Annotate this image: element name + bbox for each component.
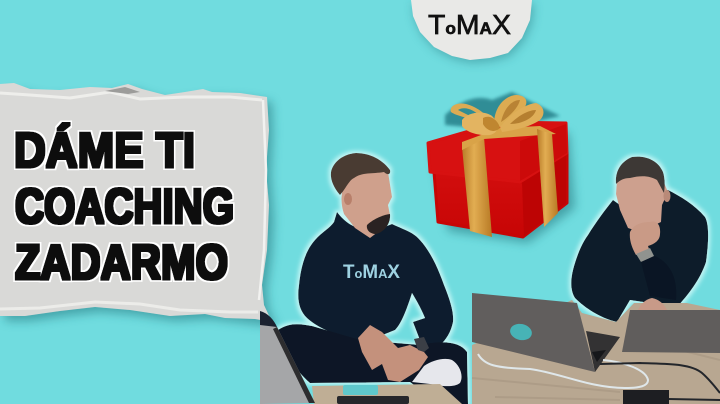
ear bbox=[664, 190, 670, 202]
phone black bbox=[337, 396, 409, 404]
wristwatch bbox=[636, 248, 654, 262]
cables and charger bbox=[478, 354, 720, 404]
bow bbox=[451, 95, 543, 135]
laptop centre bbox=[472, 293, 620, 372]
face bbox=[616, 172, 668, 232]
headline: DÁME TI bbox=[14, 124, 195, 178]
laptop left foreground bbox=[260, 311, 315, 404]
sticker bbox=[509, 322, 533, 342]
hand on table bbox=[637, 298, 667, 312]
hoodie logo: ToMAX bbox=[343, 262, 400, 283]
sock bbox=[412, 359, 462, 386]
person left: man sitting in dark hoodie bbox=[278, 153, 468, 404]
headline bbox=[14, 124, 234, 290]
box lid bbox=[428, 122, 567, 182]
logo wordmark: ToMAX bbox=[428, 9, 511, 40]
hand on chin bbox=[630, 222, 660, 255]
hair bbox=[616, 157, 665, 193]
beard bbox=[367, 214, 390, 234]
box body bbox=[428, 122, 567, 237]
logo badge: torn paper circle bbox=[411, 0, 534, 63]
phone teal bbox=[343, 385, 378, 395]
hair bbox=[331, 153, 390, 195]
table under left man bbox=[312, 384, 462, 404]
torn paper panel bbox=[0, 83, 277, 327]
legs bbox=[278, 324, 468, 404]
laptop right bbox=[622, 310, 720, 353]
person right: man leaning on hand in dark hoodie bbox=[571, 157, 708, 322]
table right bbox=[472, 300, 720, 404]
headline: ZADARMO bbox=[15, 236, 228, 290]
icon: gift box bbox=[428, 92, 575, 243]
watch bbox=[414, 337, 429, 352]
ribbon bbox=[462, 137, 492, 237]
ear bbox=[344, 193, 352, 205]
headline: COACHING bbox=[15, 180, 234, 234]
hands bbox=[358, 325, 428, 382]
hoodie and arms bbox=[298, 212, 453, 348]
neck and face bbox=[342, 168, 392, 238]
hoodie bbox=[571, 190, 708, 322]
forearm sleeve bbox=[641, 256, 676, 300]
